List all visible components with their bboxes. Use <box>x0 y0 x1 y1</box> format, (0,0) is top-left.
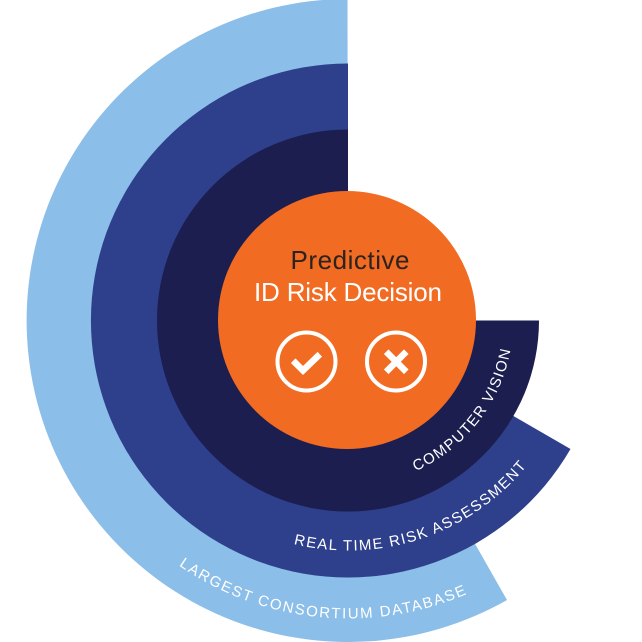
icon: check mark <box>278 332 336 390</box>
label: largest consortium database: LARGEST CONSORTIUM DATABASE <box>180 558 466 619</box>
label: computer vision: COMPUTER VISION <box>413 349 510 470</box>
label: real time risk assessment: REAL TIME RISK ASSESSMENT <box>294 460 524 550</box>
heading: id risk decision: ID Risk Decision <box>254 277 442 307</box>
icon: cross mark <box>367 332 425 390</box>
heading: predictive: Predictive <box>290 245 410 275</box>
center circle <box>218 191 476 449</box>
